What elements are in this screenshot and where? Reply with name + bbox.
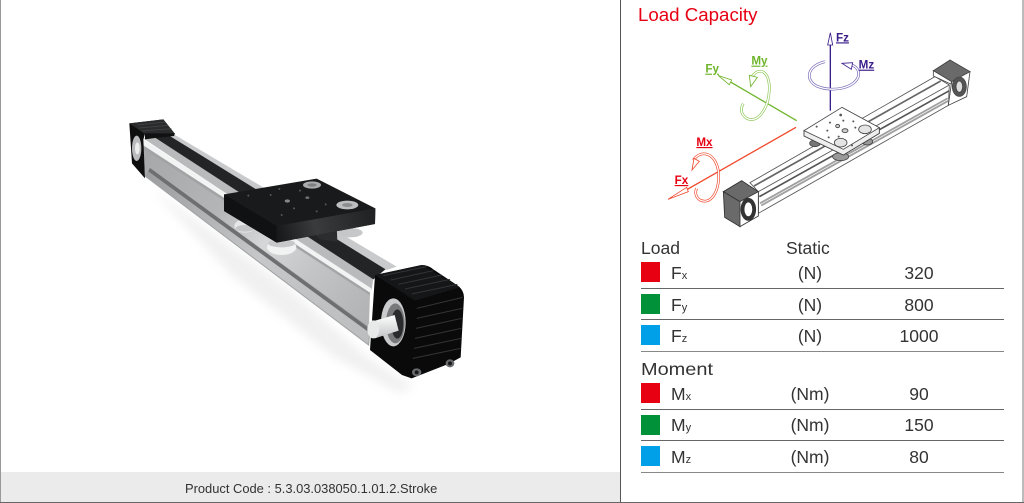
near end block bbox=[370, 265, 464, 378]
axis: Fz and Mz in purple: Fz bbox=[836, 31, 849, 44]
row: Mz: (Nm) bbox=[791, 447, 829, 467]
bottom bar: product code: Product Code : 5.3.03.038050.1.01.2.Stroke bbox=[185, 481, 437, 496]
row: Mz: Mz bbox=[671, 447, 691, 467]
row: Fy bbox=[641, 294, 1004, 320]
row: Fx: (N) bbox=[798, 263, 822, 283]
row: My bbox=[641, 415, 1004, 440]
far end block bbox=[129, 119, 175, 178]
far end block bbox=[933, 60, 970, 105]
header: static: Static bbox=[786, 238, 830, 258]
carriage rollers bbox=[234, 219, 363, 255]
axis: Fx and Mx in red: Fx bbox=[675, 174, 689, 187]
row: Mz bbox=[641, 446, 1004, 472]
axis: Fz and Mz in purple bbox=[809, 31, 874, 111]
header: moment: Moment bbox=[641, 359, 713, 379]
axis: Fy and My in green bbox=[705, 55, 797, 121]
row: Fy: (N) bbox=[798, 295, 822, 315]
row: Fx: Fx bbox=[671, 263, 688, 283]
row: Fz: Fz bbox=[671, 326, 687, 346]
near end block bbox=[723, 181, 758, 227]
row: Fx bbox=[641, 262, 1004, 288]
axis: Fz and Mz in purple: Mz bbox=[859, 59, 874, 72]
panel title: load capacity: Load Capacity bbox=[638, 4, 758, 25]
axis: Fy and My in green: My bbox=[751, 55, 768, 68]
row: Mx bbox=[641, 383, 1004, 410]
bottom bar: product code bbox=[1, 472, 620, 502]
row: Mx: (Nm) bbox=[791, 384, 829, 404]
load capacity table bbox=[641, 238, 1004, 472]
force and moment diagram bbox=[668, 31, 970, 227]
soft ground shadow bbox=[150, 187, 413, 393]
actuator rail body bbox=[143, 135, 397, 345]
row: Mx: Mx bbox=[671, 384, 692, 404]
row: Mz: 80 bbox=[909, 447, 929, 467]
rail outline bbox=[750, 77, 949, 213]
row: My: My bbox=[671, 415, 692, 435]
carriage plate bbox=[804, 107, 879, 161]
axis: Fx and Mx in red: Mx bbox=[696, 136, 713, 149]
row: Fz: 1000 bbox=[900, 326, 939, 346]
output shaft bbox=[367, 315, 399, 338]
header: load: Load bbox=[641, 238, 680, 258]
carriage plate bbox=[224, 179, 375, 243]
row: Fz bbox=[641, 325, 1004, 352]
row: Mx: 90 bbox=[909, 384, 929, 404]
axis: Fx and Mx in red bbox=[668, 127, 796, 201]
row: My: 150 bbox=[904, 415, 934, 435]
row: Fz: (N) bbox=[798, 326, 822, 346]
product photo: linear actuator bbox=[129, 119, 464, 393]
row: Fx: 320 bbox=[904, 263, 934, 283]
axis: Fy and My in green: Fy bbox=[705, 63, 719, 76]
row: Fy: 800 bbox=[904, 295, 934, 315]
row: My: (Nm) bbox=[791, 415, 829, 435]
row: Fy: Fy bbox=[671, 295, 688, 315]
